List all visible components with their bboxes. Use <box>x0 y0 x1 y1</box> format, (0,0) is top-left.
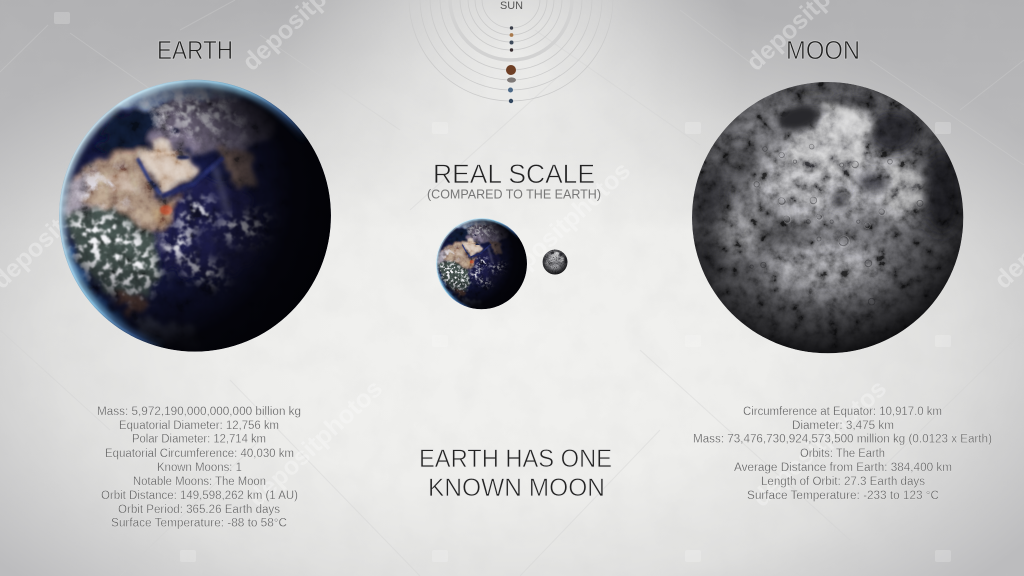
watermark: depositphotos: depositphotos <box>243 374 388 512</box>
watermark: depositphotos: depositphotos <box>491 156 636 294</box>
Moon facts: Length of Orbit: 27.3 Earth days <box>761 476 925 488</box>
heading: real scale <box>427 159 601 202</box>
title: Moon: MOON <box>786 35 860 65</box>
heading: real scale: (COMPARED TO THE EARTH) <box>427 186 601 202</box>
Earth facts: Equatorial Circumference: 40,030 km <box>105 448 294 460</box>
Earth facts <box>97 406 301 530</box>
Earth facts: Surface Temperature: -88 to 58°C <box>111 518 287 530</box>
heading: real scale: REAL SCALE <box>433 159 595 189</box>
Moon facts: Average Distance from Earth: 384,400 km <box>734 462 952 474</box>
small Moon <box>542 249 568 275</box>
solar system diagram <box>409 0 613 103</box>
Earth facts: Orbit Distance: 149,598,262 km (1 AU) <box>101 490 298 502</box>
Moon facts: Orbits: The Earth <box>800 448 885 460</box>
small Earth <box>433 215 530 312</box>
label: sun: SUN <box>500 0 523 12</box>
Earth facts: Mass: 5,972,190,000,000,000 billion kg <box>97 406 301 418</box>
Earth facts: Known Moons: 1 <box>157 462 242 474</box>
planet: Moon large <box>685 75 970 360</box>
Earth facts: Equatorial Diameter: 12,756 km <box>119 420 279 432</box>
planets <box>506 26 516 103</box>
Earth facts: Orbit Period: 365.26 Earth days <box>118 504 280 516</box>
scale comparison <box>433 215 568 312</box>
planet: Earth large <box>50 70 340 360</box>
Earth facts: Polar Diameter: 12,714 km <box>132 434 266 446</box>
watermark: depositphotos: depositphotos <box>747 374 892 512</box>
Moon facts: Circumference at Equator: 10,917.0 km <box>743 406 942 418</box>
heading: one known moon <box>419 445 612 502</box>
orbit rings <box>409 0 613 101</box>
heading: one known moon: KNOWN MOON <box>428 474 605 502</box>
Moon facts: Mass: 73,476,730,924,573,500 million kg (0.0123 x Earth) <box>693 434 992 446</box>
title: Earth: EARTH <box>157 35 233 65</box>
Earth facts: Notable Moons: The Moon <box>133 476 266 488</box>
heading: one known moon: EARTH HAS ONE <box>419 445 612 473</box>
Moon facts: Surface Temperature: -233 to 123 °C <box>747 490 939 502</box>
Moon facts: Diameter: 3,475 km <box>792 420 894 432</box>
Moon facts <box>693 406 992 502</box>
